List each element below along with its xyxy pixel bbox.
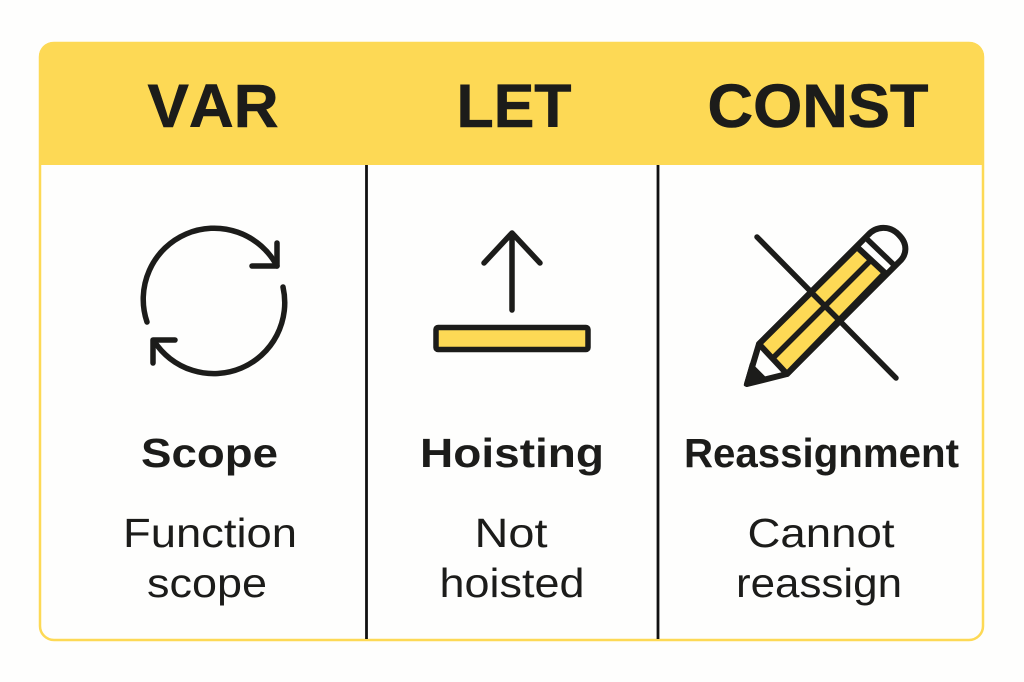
title: Scope: Scope — [141, 430, 278, 476]
icon: crossed-out pencil — [745, 228, 905, 385]
heading: VAR: VAR — [148, 72, 278, 140]
description: function scope: Function — [123, 510, 297, 556]
title: Hoisting: Hoisting — [420, 430, 604, 476]
title: Reassignment: Reassignment — [684, 430, 959, 476]
description: cannot reassign: reassign — [736, 560, 902, 606]
column divider: let and const — [657, 165, 659, 639]
header band — [39, 42, 984, 165]
description: function scope: scope — [147, 560, 267, 606]
description: function scope — [123, 510, 297, 606]
icon: circular arrows — [143, 228, 285, 374]
description: not hoisted: Not — [474, 510, 548, 556]
description: not hoisted — [440, 510, 584, 606]
icon: upward arrow over bar — [436, 233, 588, 350]
heading: CONST: CONST — [708, 72, 928, 140]
column divider: var and let — [365, 165, 368, 639]
description: cannot reassign: Cannot — [748, 510, 895, 556]
description: cannot reassign — [736, 510, 902, 606]
description: not hoisted: hoisted — [440, 560, 584, 606]
heading: LET: LET — [456, 72, 572, 140]
